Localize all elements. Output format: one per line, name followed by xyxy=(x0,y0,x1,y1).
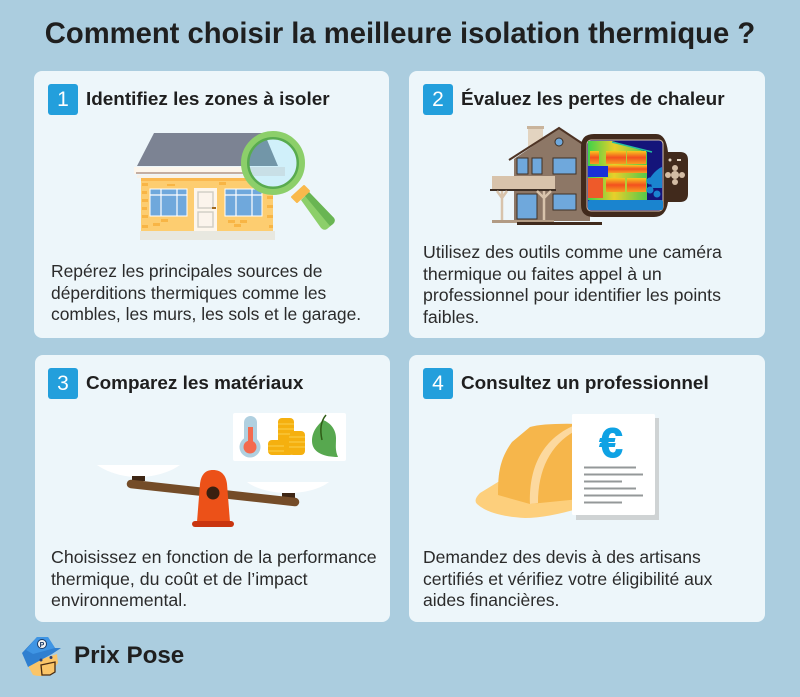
icon: house with magnifying glass xyxy=(134,131,335,240)
icon: balance scale with criteria xyxy=(98,413,346,527)
text step 3: environnemental. xyxy=(51,590,187,610)
heading step 3: Comparez les matériaux xyxy=(86,373,303,394)
text step 3: thermique, du coût et de l’impact xyxy=(51,569,308,589)
text step 1 xyxy=(51,261,361,324)
text step 3 xyxy=(51,547,377,610)
step number 1: 1 xyxy=(57,88,69,111)
step number 4 xyxy=(423,368,453,399)
text step 2 xyxy=(423,242,722,327)
panel: step 1 xyxy=(34,71,389,338)
text step 4: certifiés et vérifiez votre éligibilité aux xyxy=(423,569,712,589)
text step 2: professionnel pour identifier les points xyxy=(423,285,721,305)
step number 4: 4 xyxy=(432,372,444,395)
step number 3 xyxy=(48,368,78,399)
text step 1: combles, les murs, les sols et le garage. xyxy=(51,304,361,324)
text step 2: faibles. xyxy=(423,307,479,327)
text step 4: aides financières. xyxy=(423,590,559,610)
logo: Prix Pose xyxy=(22,637,184,676)
heading step 1: Identifiez les zones à isoler xyxy=(86,89,330,110)
text step 2: Utilisez des outils comme une caméra xyxy=(423,242,722,262)
heading step 2: Évaluez les pertes de chaleur xyxy=(461,89,725,110)
icon: hard hat with quote: € xyxy=(599,419,623,466)
text step 1: déperditions thermiques comme les xyxy=(51,283,326,303)
panel: step 2 xyxy=(409,71,765,338)
text step 4: Demandez des devis à des artisans xyxy=(423,547,701,567)
icon: hard hat with quote xyxy=(476,414,659,520)
step number 2: 2 xyxy=(432,88,444,111)
panel: step 3 xyxy=(35,355,390,622)
icon: mascot head with cap: P xyxy=(40,642,45,649)
text step 3: Choisissez en fonction de la performance xyxy=(51,547,377,567)
title: Comment choisir la meilleure isolation thermique ? xyxy=(45,18,755,50)
text step 1: Repérez les principales sources de xyxy=(51,261,322,281)
text step 4 xyxy=(423,547,712,610)
text step 2: thermique ou faites appel à un xyxy=(423,264,662,284)
heading step 4: Consultez un professionnel xyxy=(461,373,709,394)
step number 1 xyxy=(48,84,78,115)
icon: mascot head with cap xyxy=(22,637,61,676)
brand name: Prix Pose xyxy=(74,642,184,669)
icon: house with thermal camera xyxy=(490,126,688,225)
step number 2 xyxy=(423,84,453,115)
panel: step 4 xyxy=(409,355,765,622)
step number 3: 3 xyxy=(57,372,69,395)
